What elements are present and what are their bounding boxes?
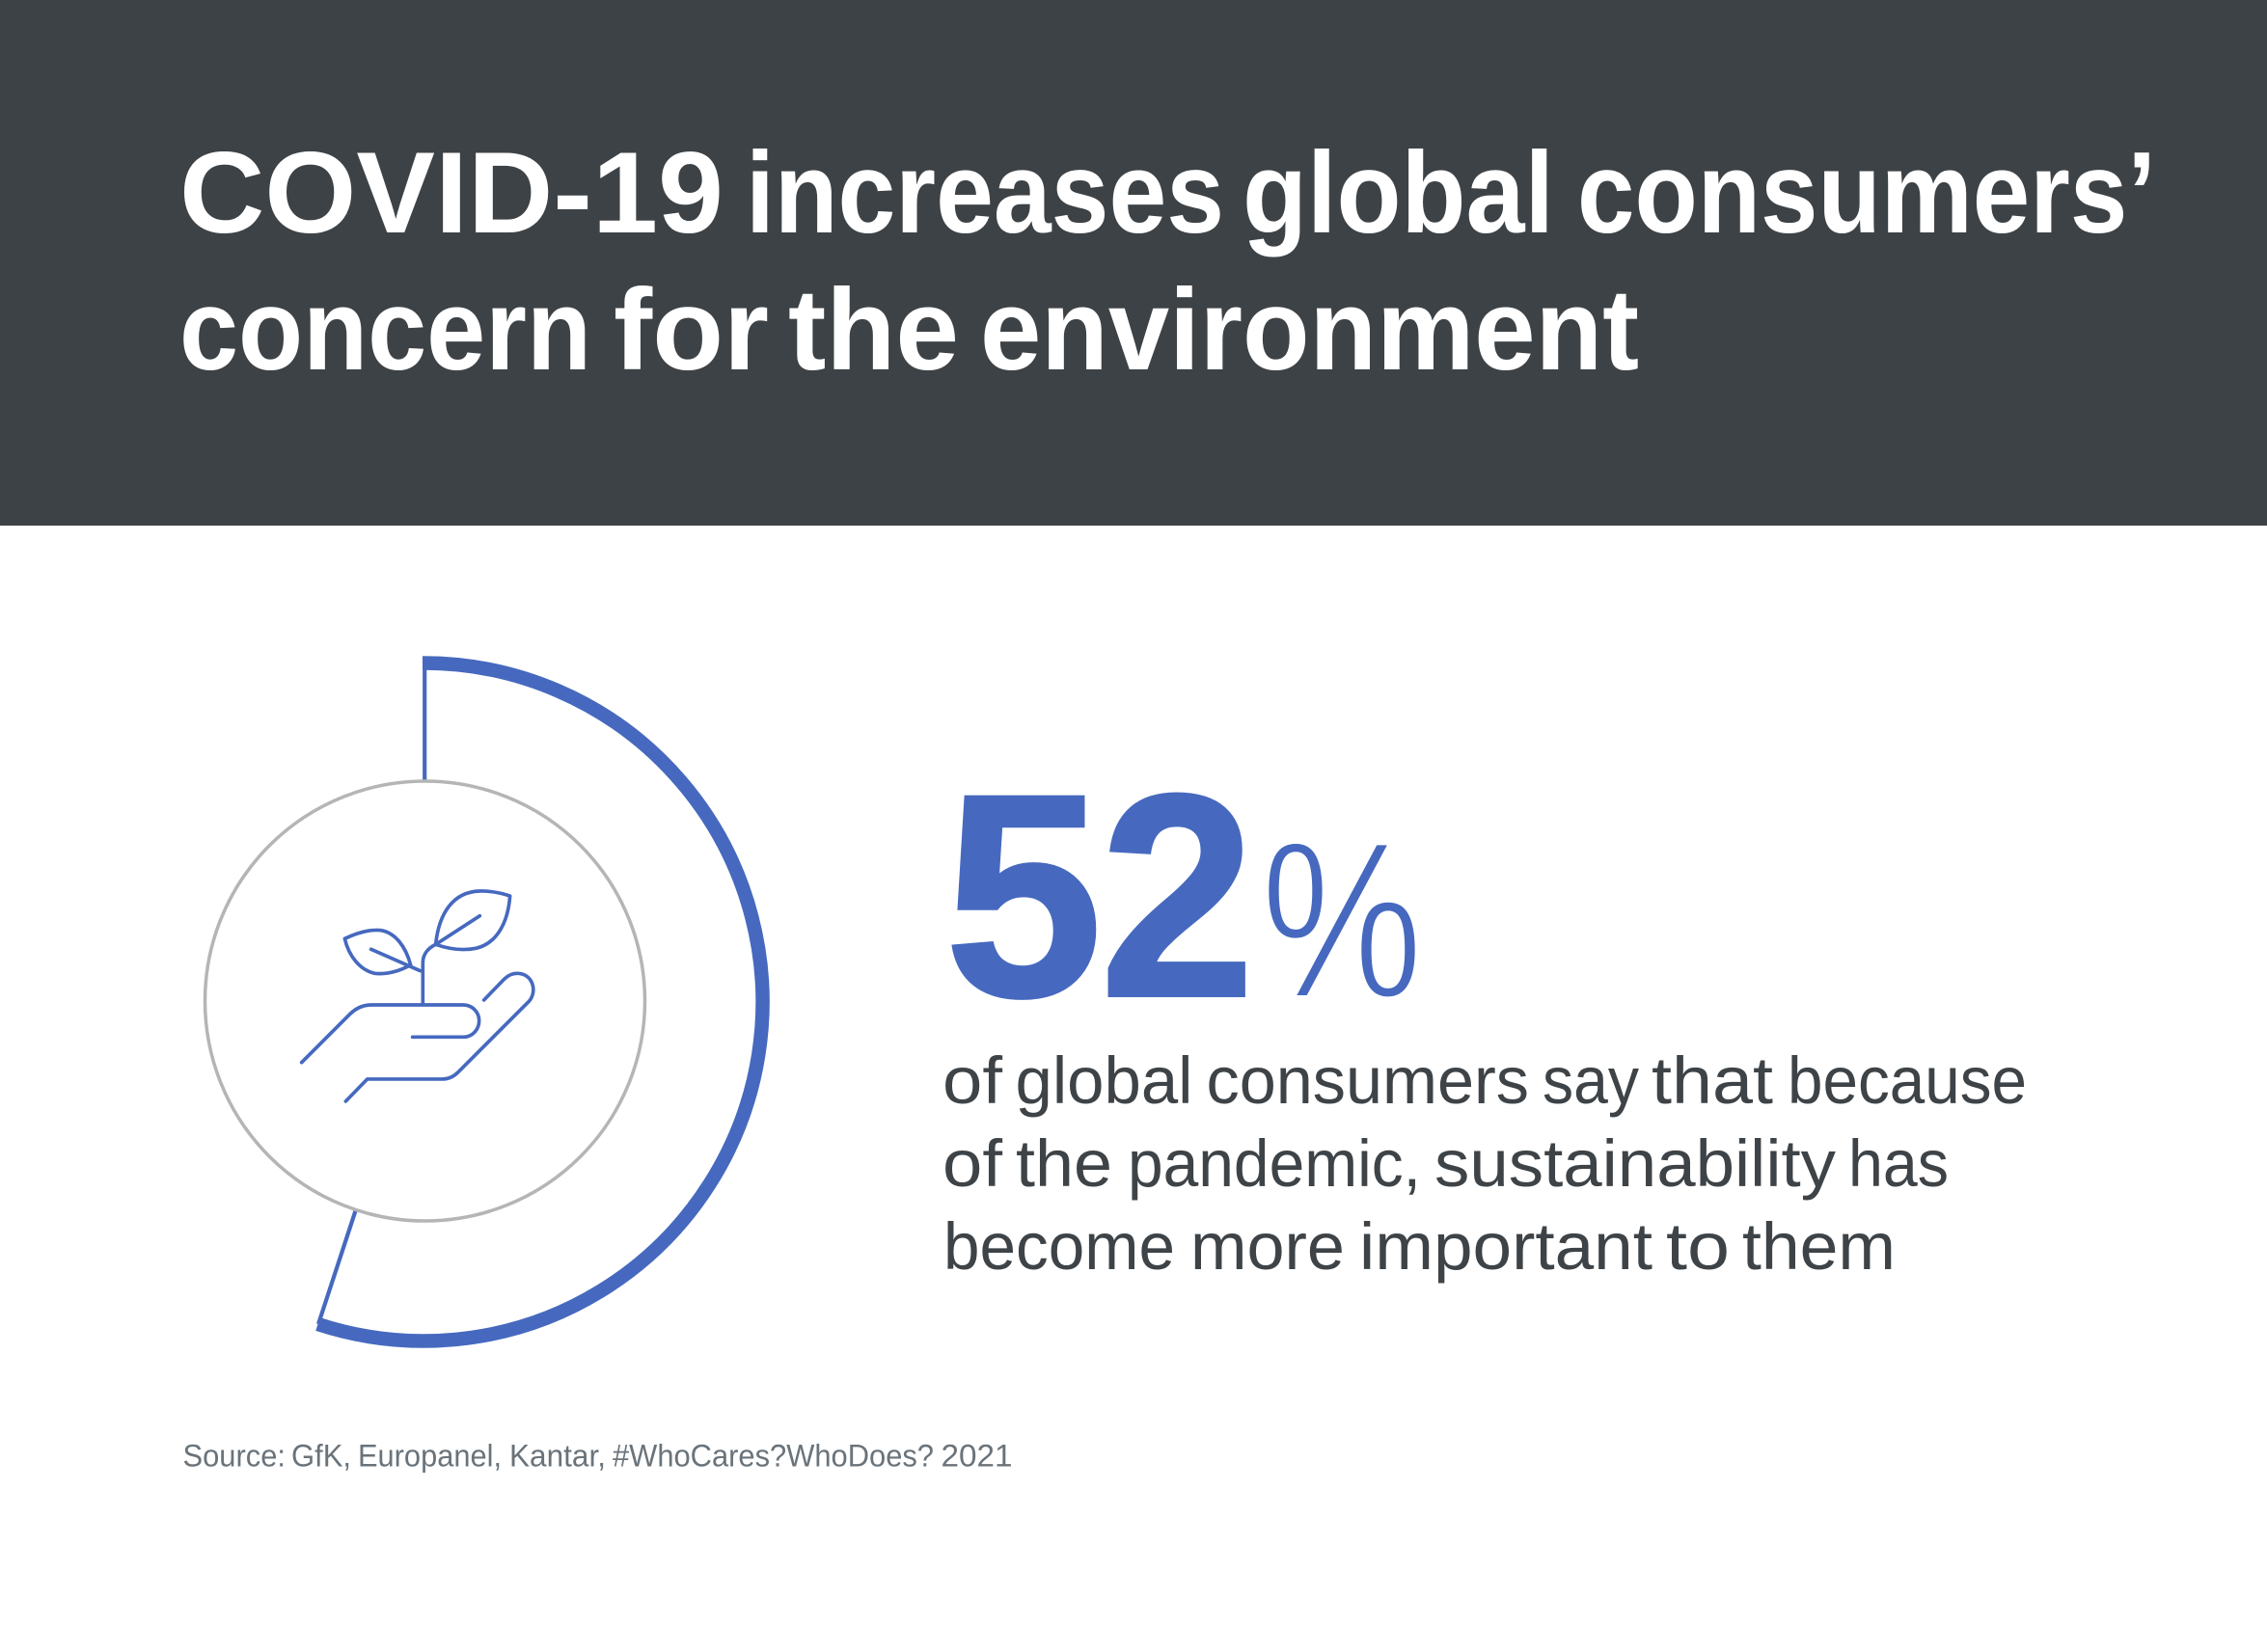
source note: GfK, [291, 1439, 351, 1474]
number 52 [944, 733, 1255, 1057]
statistic description: because [1788, 1043, 2027, 1118]
statistic description: of [942, 1043, 1003, 1118]
source note [183, 1439, 1013, 1474]
statistic description: has [1848, 1126, 1949, 1201]
statistic description: say [1543, 1043, 1639, 1118]
title: the [788, 265, 959, 394]
source note: 2021 [942, 1439, 1013, 1474]
gauge outer arc [318, 663, 763, 1341]
lower hand and finger [345, 973, 533, 1101]
source note: Europanel, [358, 1439, 502, 1474]
source note: Source: [183, 1439, 286, 1474]
title: for [614, 265, 769, 394]
statistic description: them [1742, 1209, 1896, 1284]
title: increases [746, 128, 1224, 257]
donut gauge: 52% [205, 663, 763, 1341]
statistic description: consumers [1206, 1043, 1529, 1118]
title: concern [179, 265, 591, 394]
statistic description: to [1666, 1209, 1730, 1284]
percent sign: % [1261, 796, 1423, 1045]
source note: Kantar, [509, 1439, 606, 1474]
icon: hand holding seedling [302, 891, 533, 1101]
statistic description: sustainability [1434, 1126, 1837, 1201]
statistic description: of [942, 1126, 1003, 1201]
statistic description: the [1016, 1126, 1112, 1201]
right leaf [436, 891, 510, 950]
gauge end line [318, 1209, 356, 1324]
statistic description: become [943, 1209, 1175, 1284]
palm and thumb [302, 1005, 479, 1063]
title: environment [980, 265, 1639, 394]
statistic description: important [1359, 1209, 1652, 1284]
statistic description: that [1652, 1043, 1773, 1118]
source note: #WhoCares?WhoDoes? [613, 1439, 934, 1474]
title: global [1243, 128, 1554, 257]
number 52: 5 [944, 733, 1103, 1057]
statistic description [942, 1043, 2027, 1284]
inner circle [205, 781, 644, 1221]
title: COVID-19 [179, 128, 724, 257]
stem [423, 944, 436, 1004]
statistic description: pandemic, [1128, 1126, 1421, 1201]
number 52: 2 [1100, 733, 1255, 1057]
left leaf [344, 930, 411, 974]
gauge start line [423, 664, 426, 781]
title: consumers’ [1577, 128, 2156, 257]
header band [0, 0, 2267, 526]
title [179, 128, 2156, 394]
statistic description: more [1190, 1209, 1345, 1284]
statistic description: global [1015, 1043, 1192, 1118]
